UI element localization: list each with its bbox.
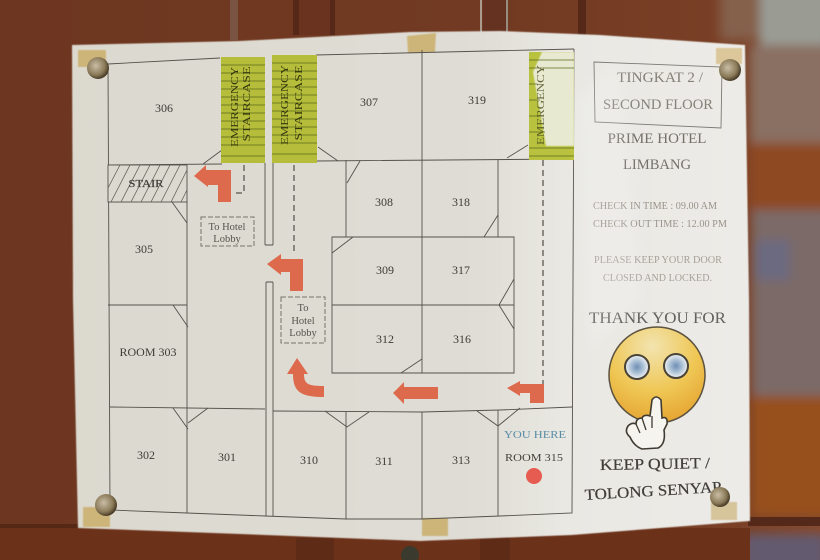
you are here marker: ROOM 315: [505, 452, 564, 464]
evacuation dashed routes: [232, 160, 543, 384]
lobby label bottom: [281, 297, 325, 343]
decorative glare: [575, 60, 640, 350]
room labels: 317: [452, 263, 470, 277]
emergency staircase right: [529, 52, 574, 160]
emergency staircase left: [221, 57, 265, 163]
red arrows: [194, 165, 544, 404]
emergency staircase left: EMERGENCY: [230, 67, 241, 147]
room labels: 316: [453, 332, 471, 346]
lobby label bottom: To: [298, 303, 308, 314]
tape pieces: [78, 33, 742, 536]
emergency staircase left: STAIRCASE: [242, 66, 253, 142]
room labels: 313: [452, 453, 470, 467]
room labels: 301: [218, 450, 236, 464]
hotel name: PRIME HOTEL: [608, 131, 706, 147]
room labels: [120, 93, 486, 468]
room labels: 312: [376, 332, 394, 346]
you are here marker: [504, 429, 566, 484]
hotel name: [608, 131, 706, 173]
paper sheet: [72, 31, 750, 541]
lobby label top: [201, 217, 254, 246]
keep quiet text: [584, 455, 722, 504]
room labels: 309: [376, 263, 394, 277]
emergency staircase middle: EMERGENCY: [280, 65, 291, 145]
room labels: 308: [375, 195, 393, 209]
room labels: 319: [468, 93, 486, 107]
title box: [594, 62, 722, 128]
emergency staircase middle: [272, 55, 317, 163]
thank you heading: THANK YOU FOR: [589, 310, 726, 327]
keep quiet text: TOLONG SENYAP: [584, 479, 722, 504]
room labels: 310: [300, 453, 318, 467]
check-in info: CHECK IN TIME : 09.00 AM: [593, 201, 717, 212]
check-in info: CHECK OUT TIME : 12.00 PM: [593, 219, 727, 230]
lobby label top: To Hotel: [209, 222, 246, 233]
stair block: STAIR: [128, 178, 164, 190]
title box: TINGKAT 2 /: [617, 70, 704, 86]
pins: [87, 57, 741, 516]
room labels: ROOM 303: [120, 345, 176, 359]
check-in info: [593, 201, 727, 284]
room labels: 305: [135, 242, 153, 256]
stair block: [108, 165, 187, 202]
title box: SECOND FLOOR: [603, 97, 713, 113]
emergency staircase right: EMERGENCY: [536, 65, 547, 145]
keep quiet text: KEEP QUIET /: [600, 455, 711, 474]
check-in info: CLOSED AND LOCKED.: [603, 273, 712, 284]
room labels: 306: [155, 101, 173, 115]
floor plan: [108, 49, 574, 519]
emergency staircase middle: STAIRCASE: [294, 66, 305, 140]
lobby label bottom: Lobby: [289, 328, 317, 339]
hotel name: LIMBANG: [623, 157, 691, 173]
room walls: [108, 49, 574, 519]
icon: shushing emoji: [609, 327, 705, 449]
room labels: 307: [360, 95, 378, 109]
door swings: [172, 147, 498, 253]
you are here marker: YOU HERE: [504, 429, 566, 441]
lobby label bottom: Hotel: [291, 316, 315, 327]
lobby label top: Lobby: [213, 234, 241, 245]
check-in info: PLEASE KEEP YOUR DOOR: [594, 255, 722, 266]
room labels: 311: [375, 454, 393, 468]
room labels: 318: [452, 195, 470, 209]
room labels: 302: [137, 448, 155, 462]
